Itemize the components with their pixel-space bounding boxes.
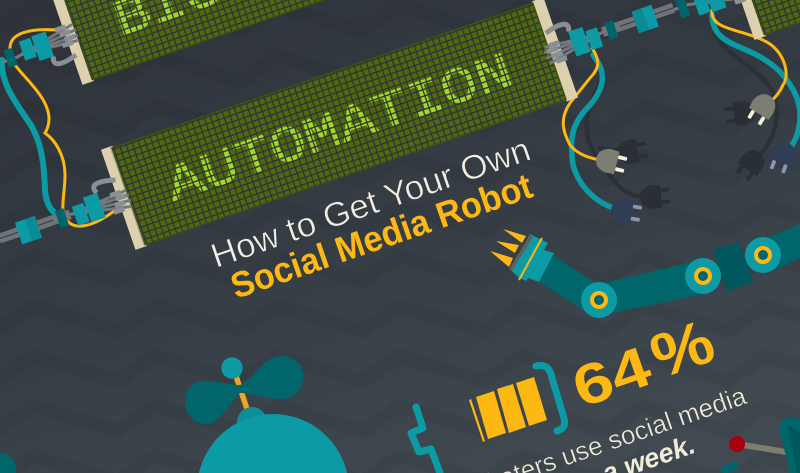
right bracket	[536, 366, 565, 431]
wire connector: middle right	[537, 0, 678, 67]
teal limb	[779, 417, 800, 473]
LED banner: top right	[720, 0, 800, 40]
stat caption	[441, 380, 750, 473]
icon: navy plug right	[769, 139, 799, 174]
robot arm	[490, 224, 800, 318]
title line two: Social Media Robot	[225, 165, 537, 307]
propeller stick	[236, 376, 248, 412]
LED banner: upper left	[48, 0, 514, 85]
propeller ball	[221, 357, 243, 379]
propeller blades	[185, 356, 303, 424]
LED banner: automation	[101, 0, 578, 250]
head bump	[237, 407, 267, 437]
icon: grey plug right	[747, 90, 780, 126]
battery bars	[469, 377, 547, 442]
gripper hand	[490, 229, 554, 282]
wire connector: upper left	[0, 21, 85, 81]
wire connector: top right	[667, 0, 755, 24]
small teal piece	[720, 461, 739, 473]
lower right robot limb	[720, 417, 800, 473]
head	[197, 414, 349, 473]
arm segments	[539, 224, 800, 313]
title	[206, 131, 537, 307]
left squiggle bracket	[411, 407, 440, 473]
joint three	[745, 237, 781, 273]
right cables and plugs	[563, 10, 800, 224]
icon: navy plug left	[609, 197, 642, 224]
left cables teal and yellow	[2, 30, 118, 226]
red knob	[729, 436, 745, 452]
icon: grey plug left	[593, 146, 627, 175]
stat: 64 percent	[411, 307, 723, 473]
cable shadows and shadow plugs	[587, 30, 777, 210]
title line one: How to Get Your Own	[206, 131, 535, 276]
LED banner: automation: AUTOMATION	[160, 44, 521, 216]
lower left teal circle	[0, 453, 16, 473]
percent sign: %	[642, 307, 723, 392]
wire connector: lower left	[0, 175, 134, 251]
robot head with propeller	[185, 356, 349, 473]
joint two	[685, 258, 721, 294]
joint one	[581, 282, 617, 318]
number: 64	[564, 334, 659, 420]
limb facet	[788, 425, 800, 473]
red knob arm	[737, 444, 786, 452]
